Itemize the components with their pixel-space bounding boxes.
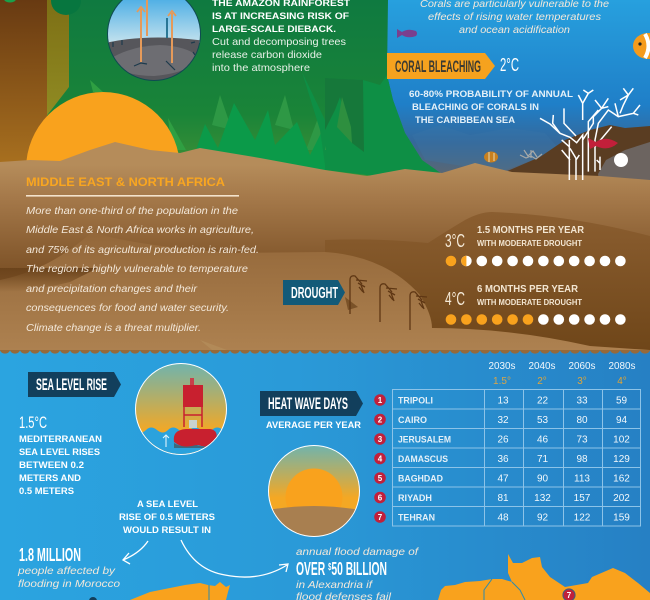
- morocco stat: people affected by: [17, 565, 116, 577]
- table rows: JERUSALEM: [398, 434, 451, 446]
- table rows: 48: [497, 512, 509, 524]
- amazon text: IS AT INCREASING RISK OF: [212, 11, 349, 22]
- jungle foliage: [90, 72, 442, 176]
- city number badges: [374, 394, 386, 523]
- table column headers: 3°: [577, 376, 587, 387]
- city number badges: 4: [378, 454, 383, 464]
- map: middle east: [438, 554, 650, 600]
- alexandria stat: in Alexandria if: [296, 579, 373, 591]
- sea level text: METERS AND: [19, 473, 81, 484]
- table rows: 47: [497, 474, 509, 484]
- morocco stat: flooding in Morocco: [18, 578, 120, 590]
- icon: bleached coral: [540, 88, 640, 180]
- middle east paragraph: Climate change is a threat multiplier.: [26, 322, 201, 334]
- city number badges: 3: [378, 435, 383, 444]
- icon: small clownfish: [484, 152, 498, 162]
- sea floor grey rock: [598, 142, 650, 185]
- sea level text: 0.5 METERS: [19, 486, 74, 497]
- table rows: 92: [537, 512, 548, 524]
- table rows: 98: [576, 454, 588, 465]
- table rows: [398, 396, 630, 524]
- table rows: 32: [497, 415, 509, 426]
- coral 2 degrees: 2°C: [500, 55, 519, 75]
- table rows: 81: [497, 493, 509, 504]
- table column headers: 2°: [537, 376, 547, 387]
- alexandria stat: 50 BILLION: [331, 559, 387, 579]
- sea level rise tag: [28, 372, 121, 397]
- sea level rise result text: WOULD RESULT IN: [123, 525, 211, 536]
- middle east heading: MIDDLE EAST & NORTH AFRICA: [26, 177, 225, 189]
- table rows: 80: [576, 415, 588, 426]
- drought 3 degrees row: 1.5 MONTHS PER YEAR: [477, 225, 585, 236]
- alexandria stat: [296, 546, 419, 600]
- amazon text: release carbon dioxide: [212, 49, 322, 61]
- table column headers: 1.5°: [493, 376, 511, 387]
- coral intro text: and ocean acidification: [459, 24, 570, 36]
- background: lower blue section: [0, 350, 650, 600]
- sea level text: [19, 434, 102, 497]
- morocco stat: [17, 545, 120, 590]
- heat wave tag: [260, 391, 363, 416]
- coral intro text: effects of rising water temperatures: [428, 11, 602, 23]
- table rows: 26: [497, 434, 509, 446]
- drought 3 degrees row: 3°C: [445, 231, 465, 251]
- coral bleaching tag: [387, 53, 495, 79]
- coral probability text: THE CARIBBEAN SEA: [415, 115, 515, 126]
- coral intro text: [420, 0, 609, 36]
- icon: bleached grey coral: [520, 150, 542, 159]
- sea level 1.5 degrees: 1.5°C: [19, 414, 47, 432]
- drought tag: [283, 280, 358, 310]
- sea level rise result text: [119, 499, 215, 536]
- background: rainforest: [0, 0, 450, 190]
- arrow to morocco: [123, 541, 148, 564]
- amazon text: [212, 0, 350, 74]
- middle east paragraph: [26, 205, 259, 334]
- table rows: 90: [537, 474, 548, 484]
- icon: clownfish: [633, 33, 650, 59]
- dunes: [0, 212, 650, 350]
- coral probability text: [409, 89, 573, 126]
- table rows: 122: [574, 512, 591, 524]
- coral probability text: BLEACHING OF CORALS IN: [412, 102, 539, 113]
- background: ocean: [387, 0, 650, 190]
- drought 3 degrees row: WITH MODERATE DROUGHT: [477, 239, 582, 248]
- map badge 7: [563, 589, 575, 600]
- arrow to alexandria: [181, 540, 288, 577]
- middle east paragraph: consequences for food and water security.: [26, 302, 229, 314]
- table column headers: 2080s: [608, 361, 636, 372]
- map badge 7: 7: [567, 591, 572, 600]
- icon: buoy circle: [135, 363, 234, 455]
- drought tag: DROUGHT: [291, 285, 338, 302]
- drought 3 degrees row: [445, 225, 626, 266]
- background: desert with sand horizon: [0, 142, 650, 350]
- table column headers: 2030s: [488, 361, 516, 372]
- middle east paragraph: and precipitation changes and their: [26, 283, 198, 295]
- city number badges: 6: [378, 494, 383, 502]
- icon: heat sun circle: [268, 445, 360, 540]
- table rows: 73: [576, 434, 588, 446]
- table column headers: 2060s: [568, 361, 596, 372]
- table rows: 22: [537, 396, 548, 406]
- table rows: 53: [537, 415, 548, 426]
- sea floor backdrop: [412, 125, 560, 172]
- table rows: 13: [497, 396, 509, 406]
- icon: purple fish: [397, 29, 417, 38]
- heat wave subtitle: AVERAGE PER YEAR: [266, 420, 361, 431]
- sea level rise result text: A SEA LEVEL: [137, 499, 198, 510]
- drought 4 degrees row: 4°C: [445, 289, 465, 309]
- amazon text: Cut and decomposing trees: [212, 36, 346, 48]
- middle east paragraph: More than one-third of the population in the: [26, 205, 238, 217]
- table column headers: [488, 361, 636, 387]
- table rows: 36: [497, 454, 509, 465]
- table rows: TRIPOLI: [398, 396, 433, 406]
- sea level rise result text: RISE OF 0.5 METERS: [119, 512, 215, 523]
- table rows: 202: [613, 493, 630, 504]
- table rows: 102: [613, 434, 630, 446]
- icon: setting sun: [26, 92, 180, 246]
- amazon text: into the atmosphere: [212, 62, 310, 74]
- table rows: 132: [534, 493, 551, 504]
- map pin fragment: [89, 597, 97, 600]
- middle east paragraph: and 75% of its agricultural production is rain-fed.: [26, 244, 259, 256]
- table rows: 71: [537, 454, 548, 465]
- table rows: 46: [537, 434, 548, 446]
- table rows: TEHRAN: [398, 512, 435, 524]
- table rows: CAIRO: [398, 415, 427, 426]
- icon: wilted plants: [350, 276, 427, 330]
- table rows: 113: [574, 474, 590, 484]
- table rows: RIYADH: [398, 493, 432, 504]
- sea level text: BETWEEN 0.2: [19, 460, 84, 471]
- morocco stat: 1.8 MILLION: [19, 545, 81, 565]
- table rows: 59: [616, 396, 627, 406]
- alexandria stat: OVER: [296, 559, 347, 579]
- heat wave table: [374, 361, 640, 526]
- city number badges: 5: [378, 474, 383, 483]
- coral probability text: 60-80% PROBABILITY OF ANNUAL: [409, 89, 573, 100]
- table rows: 94: [616, 415, 627, 426]
- table rows: 157: [574, 493, 591, 504]
- heat wave tag: HEAT WAVE DAYS: [268, 394, 348, 413]
- table rows: 162: [613, 474, 630, 484]
- table rows: 129: [613, 454, 630, 465]
- icon: amazon dieback circle: [107, 0, 201, 81]
- table rows: 33: [576, 396, 588, 406]
- middle east paragraph: Middle East & North Africa works in agriculture,: [26, 224, 254, 236]
- drought 4 degrees row: [445, 284, 626, 325]
- alexandria stat: $: [328, 562, 332, 573]
- sea level text: MEDITERRANEAN: [19, 434, 102, 445]
- table rows: BAGHDAD: [398, 474, 443, 484]
- city number badges: 1: [378, 396, 383, 405]
- city number badges: 2: [378, 416, 383, 424]
- icon: sea urchin: [614, 153, 628, 167]
- amazon text: LARGE-SCALE DIEBACK.: [212, 24, 336, 35]
- map: north africa west: [130, 582, 230, 600]
- icon: red fish: [588, 138, 618, 149]
- coral bleaching tag: CORAL BLEACHING: [395, 57, 481, 76]
- sea floor brown mound: [505, 125, 650, 185]
- table column headers: 4°: [617, 376, 627, 387]
- sea level rise tag: SEA LEVEL RISE: [36, 375, 107, 394]
- city number badges: 7: [378, 513, 383, 522]
- drought 4 degrees row: 6 MONTHS PER YEAR: [477, 284, 579, 295]
- tree trunk: [0, 0, 81, 165]
- table rows: DAMASCUS: [398, 454, 448, 465]
- drought 4 degrees row: WITH MODERATE DROUGHT: [477, 298, 582, 307]
- table column headers: 2040s: [528, 361, 556, 372]
- alexandria stat: annual flood damage of: [296, 546, 419, 558]
- table rows: 159: [613, 512, 630, 524]
- middle east paragraph: The region is highly vulnerable to temperature: [26, 263, 248, 275]
- sea level text: SEA LEVEL RISES: [19, 447, 100, 458]
